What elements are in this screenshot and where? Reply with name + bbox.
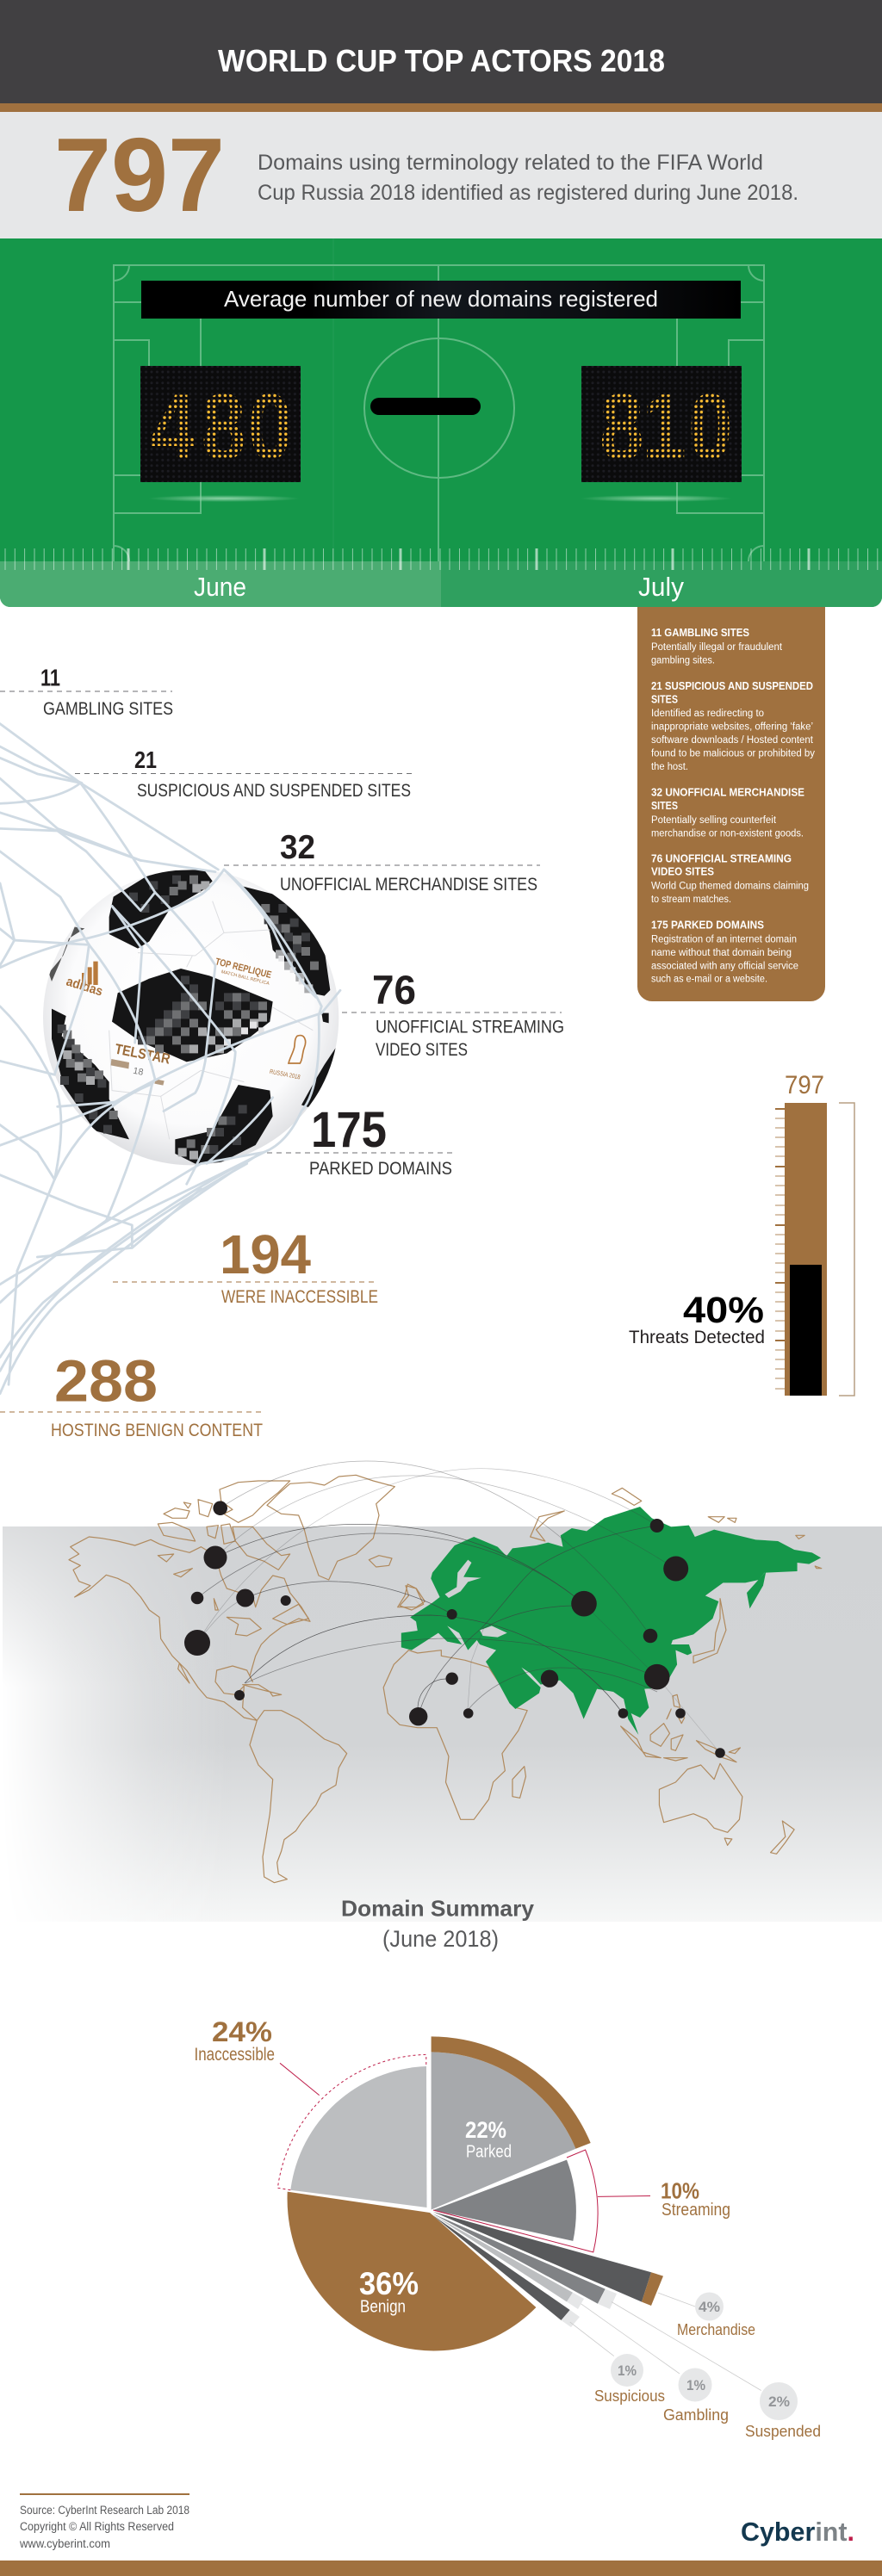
definition: streaming: World Cup themed domains claiming [651, 882, 809, 892]
stat: 21 suspicious and suspended sites: 21 [134, 746, 157, 773]
stat: 175 parked domains: 175 [311, 1102, 387, 1158]
threats detected label: Threats Detected [629, 1328, 765, 1347]
definition: suspicious and suspended: found to be malicious or prohibited by [651, 749, 815, 759]
world map section [0, 1461, 882, 1922]
intro text: Domains using terminology related to the FIFA World [258, 151, 763, 175]
ruler ticks [5, 548, 878, 570]
stat: 194 inaccessible: WERE INACCESSIBLE [221, 1287, 378, 1307]
slice: suspicious [432, 2214, 665, 2405]
header bar [0, 0, 882, 112]
June label: June [194, 572, 246, 602]
definition: parked [651, 919, 798, 985]
definition: suspicious and suspended: SITES [651, 692, 678, 706]
definition: suspicious and suspended: 21 SUSPICIOUS AND SUSPENDED [651, 679, 813, 692]
stat: 32 unofficial merchandise sites: UNOFFICIAL MERCHANDISE SITES [280, 875, 537, 895]
slice: streaming: Streaming [662, 2201, 730, 2220]
stat: 194 inaccessible: 194 [220, 1223, 311, 1285]
stat: 32 unofficial merchandise sites [224, 829, 540, 895]
definition: parked: such as e-mail or a website. [651, 975, 767, 985]
stat: 76 unofficial streaming video sites: UNOFFICIAL STREAMING [376, 1018, 564, 1037]
pitch lines [114, 238, 764, 562]
slice: inaccessible [195, 2016, 427, 2208]
stat: 21 suspicious and suspended sites [75, 746, 414, 801]
gauge total: 797 [785, 1071, 824, 1099]
slice: parked [432, 2036, 591, 2209]
section heading: domain summary: Domain Summary [341, 1896, 535, 1922]
slice: merchandise: 4% [699, 2299, 720, 2315]
gauge ticks [775, 1109, 785, 1341]
definition: gambling: Potentially illegal or fraudulent [651, 642, 783, 653]
stat: 175 parked domains: PARKED DOMAINS [309, 1159, 452, 1179]
slice: suspicious: 1% [618, 2362, 637, 2379]
definition: streaming: 76 UNOFFICIAL STREAMING [651, 851, 792, 864]
section heading: domain summary [341, 1896, 535, 1952]
definition: suspicious and suspended [651, 679, 815, 772]
definition: streaming [651, 851, 809, 905]
scoreboard: July 810: 810 [599, 375, 732, 480]
ball printed marks: MATCH BALL REPLICA [220, 969, 270, 987]
definition: merchandise: Potentially selling counterfeit [651, 815, 777, 826]
definition: streaming: to stream matches. [651, 895, 731, 905]
slice: merchandise [433, 2212, 755, 2338]
stat: 21 suspicious and suspended sites: SUSPICIOUS AND SUSPENDED SITES [137, 781, 411, 801]
brown definitions panel [637, 603, 825, 1001]
gauge bracket [839, 1103, 854, 1396]
slice: streaming: 10% [661, 2178, 699, 2204]
definition: parked: associated with any official service [651, 961, 798, 971]
stat: 11 gambling sites [0, 665, 173, 719]
slice: benign [288, 2192, 536, 2350]
40 percent label: 40% [683, 1290, 764, 1331]
Eurasia highlighted [401, 1507, 821, 1735]
footer bar [0, 2561, 882, 2576]
band: June [0, 561, 441, 607]
definition: merchandise: merchandise or non-existent goods. [651, 828, 804, 839]
ball printed marks: 18 [132, 1066, 144, 1078]
stat: 288 benign: HOSTING BENIGN CONTENT [51, 1421, 263, 1440]
source footer [19, 2493, 189, 2550]
slice: streaming [433, 2150, 730, 2252]
intro text [258, 151, 798, 205]
slice: inaccessible: Inaccessible [195, 2045, 275, 2065]
slice: benign: Benign [360, 2297, 406, 2316]
slice: suspended: Suspended [745, 2422, 821, 2440]
section heading: domain summary: (June 2018) [382, 1926, 499, 1952]
ball printed marks: TOP REPLIQUE [214, 957, 273, 981]
map backdrop [0, 1526, 882, 1922]
slice: suspended: 2% [768, 2393, 790, 2410]
band: July [441, 561, 882, 607]
definition: merchandise [651, 786, 804, 839]
July label: July [638, 572, 684, 602]
slice: inaccessible: 24% [212, 2016, 272, 2047]
source footer: Source: CyberInt Research Lab 2018 [20, 2504, 189, 2517]
definition: parked: name without that domain being [651, 948, 792, 958]
football in net [0, 724, 340, 1394]
slice: gambling: 1% [686, 2377, 705, 2393]
Americas and Greenland outlines [69, 1475, 425, 1883]
definition: merchandise: 32 UNOFFICIAL MERCHANDISE [651, 786, 804, 799]
definition: gambling [651, 626, 783, 666]
definition: merchandise: SITES [651, 799, 678, 812]
scoreboard: June 480 [140, 366, 301, 502]
definition: parked: Registration of an internet domain [651, 935, 797, 945]
definition: suspicious and suspended: inappropriate websites, offering ‘fake’ [651, 722, 813, 733]
ball [43, 870, 339, 1165]
stat: 288 benign [0, 1348, 264, 1440]
score dash [370, 398, 481, 415]
stat: 175 parked domains [267, 1102, 452, 1179]
slice: parked: Parked [466, 2142, 512, 2161]
Africa, Oceania and islands outlines [383, 1488, 822, 1854]
gauge fill [790, 1265, 822, 1396]
slice: suspended [432, 2214, 821, 2440]
ball printed marks [65, 957, 306, 1086]
definition: suspicious and suspended: Identified as redirecting to [651, 709, 764, 719]
net [0, 724, 340, 1394]
ball printed marks: adidas [65, 975, 104, 999]
gauge bar [785, 1103, 827, 1396]
stat: 288 benign: 288 [54, 1348, 158, 1414]
definition: suspicious and suspended: software downloads / Hosted content [651, 735, 814, 746]
slice: parked: 22% [465, 2117, 506, 2143]
definition: parked: 175 PARKED DOMAINS [651, 919, 764, 932]
slice: gambling: Gambling [663, 2406, 729, 2424]
stat: 76 unofficial streaming video sites: 76 [372, 967, 416, 1012]
caption bar [141, 281, 741, 319]
stat: 32 unofficial merchandise sites: 32 [280, 829, 315, 866]
football pitch scoreboard panel [0, 238, 882, 607]
stat: 76 unofficial streaming video sites [342, 967, 564, 1060]
title: WORLD CUP TOP ACTORS 2018 [218, 43, 665, 78]
source footer: www.cyberint.com [19, 2537, 110, 2550]
stat: 11 gambling sites: 11 [40, 665, 60, 690]
slice: merchandise: Merchandise [677, 2320, 755, 2338]
ball printed marks: TELSTAR [114, 1041, 171, 1068]
big number 797: 797 [54, 116, 225, 233]
slice: benign: 36% [359, 2266, 419, 2301]
intro text: Cup Russia 2018 identified as registered during June 2018. [258, 181, 798, 205]
location dots [184, 1501, 725, 1758]
definition: gambling: 11 GAMBLING SITES [651, 626, 749, 639]
threats thermometer gauge [629, 1071, 854, 1396]
scoreboard: July 810 [581, 366, 742, 502]
source footer: Copyright © All Rights Reserved [20, 2520, 174, 2533]
caption bar: Average number of new domains registered [224, 286, 658, 312]
stat: 76 unofficial streaming video sites: VIDEO SITES [376, 1040, 468, 1060]
stat: 194 inaccessible [113, 1223, 378, 1307]
definition: suspicious and suspended: the host. [651, 762, 688, 772]
definition: gambling: gambling sites. [651, 656, 715, 666]
ball printed marks: RUSSIA 2018 [269, 1068, 301, 1081]
stat: 11 gambling sites: GAMBLING SITES [43, 699, 173, 719]
pie chart [195, 2016, 821, 2440]
scoreboard: June 480: 480 [151, 375, 293, 480]
intro band [0, 112, 882, 238]
slice: gambling [432, 2214, 729, 2424]
slice: suspicious: Suspicious [594, 2387, 665, 2405]
definition: streaming: VIDEO SITES [651, 865, 714, 878]
connection arcs [197, 1461, 720, 1753]
logo: Cyberint: Cyberint. [741, 2517, 854, 2547]
